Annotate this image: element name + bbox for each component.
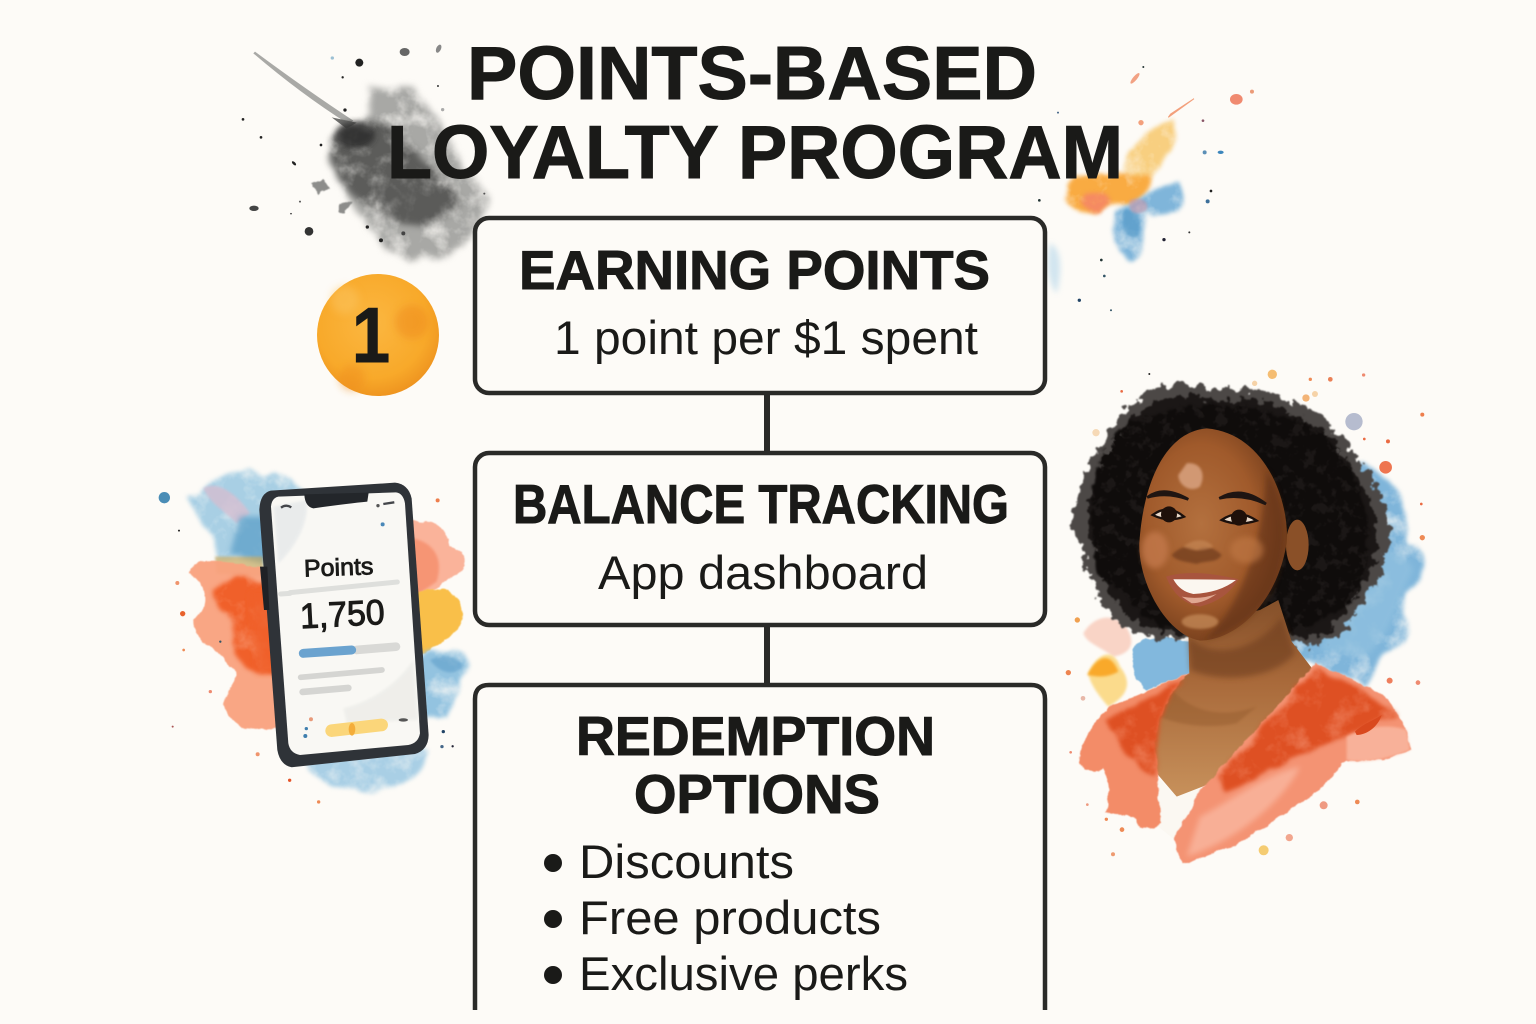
paint splash behind phone bbox=[159, 470, 468, 804]
nose bbox=[1172, 547, 1222, 564]
phone screen bbox=[271, 492, 420, 755]
list: exclusive perks: Exclusive perks bbox=[579, 947, 908, 1000]
progress bar bbox=[303, 647, 396, 653]
heading: redemption options: REDEMPTION bbox=[576, 705, 935, 767]
heading: balance tracking: BALANCE TRACKING bbox=[513, 473, 1009, 535]
eyes bbox=[1153, 506, 1257, 526]
illustration: smiling woman portrait bbox=[1066, 370, 1425, 863]
smile bbox=[1166, 573, 1238, 607]
title bbox=[387, 31, 1123, 194]
paint splash behind portrait bbox=[1066, 370, 1425, 856]
value: 1,750: 1,750 bbox=[299, 593, 386, 636]
ear bbox=[1286, 520, 1309, 570]
shirt bbox=[1079, 663, 1411, 863]
panel: redemption options bbox=[475, 685, 1045, 1010]
undershirt bbox=[1155, 775, 1207, 840]
title: POINTS-BASED bbox=[467, 31, 1037, 115]
heading: earning points: EARNING POINTS bbox=[519, 239, 990, 301]
connector: earning to balance bbox=[764, 393, 770, 453]
icon: step number coin: 1 bbox=[352, 291, 390, 379]
phone button bbox=[332, 723, 382, 736]
list: discounts: Discounts bbox=[579, 835, 794, 888]
title: LOYALTY PROGRAM bbox=[387, 110, 1123, 194]
list: free products: Free products bbox=[579, 891, 881, 944]
connector: balance to redemption bbox=[764, 625, 770, 685]
text: points rate: 1 point per $1 spent bbox=[554, 311, 978, 364]
phone side button bbox=[260, 567, 269, 610]
panel: earning points bbox=[475, 218, 1045, 393]
ink splash: black bbox=[242, 44, 490, 260]
heading: redemption options bbox=[576, 705, 935, 825]
illustration: phone with splash bbox=[159, 470, 468, 804]
neck and chest bbox=[1150, 600, 1323, 800]
label: points: Points bbox=[304, 553, 374, 583]
icon: step number coin bbox=[317, 274, 439, 396]
face bbox=[1139, 428, 1287, 641]
phone body bbox=[259, 483, 429, 767]
eyebrows bbox=[1147, 492, 1266, 504]
paint splash: orange and blue bbox=[1038, 66, 1254, 311]
text: app dashboard: App dashboard bbox=[598, 546, 928, 599]
phone notch bbox=[304, 493, 369, 508]
panel: balance tracking bbox=[475, 453, 1045, 625]
heading: redemption options: OPTIONS bbox=[634, 763, 880, 825]
hair bbox=[1074, 385, 1389, 646]
